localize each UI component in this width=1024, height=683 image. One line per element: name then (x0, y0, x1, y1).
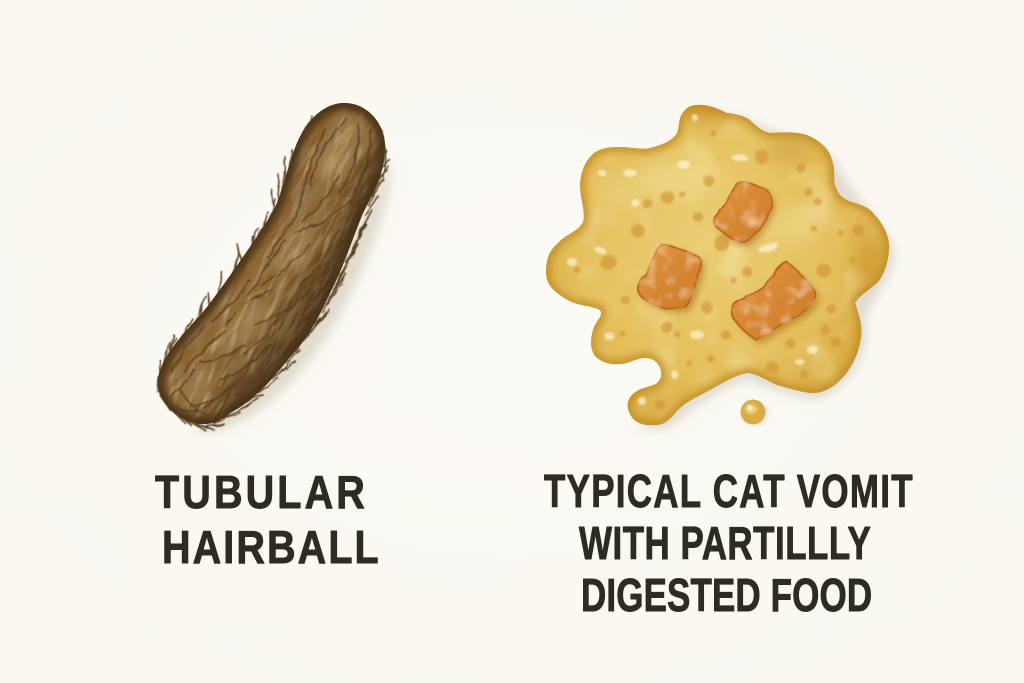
label: tubular hairball: HAIRBALL (162, 522, 379, 574)
label: typical cat vomit: WITH PARTILLLY (579, 517, 871, 569)
food chunk: top (714, 182, 775, 246)
hairball body (158, 103, 385, 424)
droplet (740, 400, 768, 425)
dark fur streaks, axis-aligned (158, 104, 384, 424)
illustration: vomit puddle (546, 104, 898, 433)
puddle body (546, 105, 889, 425)
puddle shading, spots and highlights (546, 104, 890, 426)
dark rim (158, 103, 385, 424)
darker lower right flank (215, 145, 385, 413)
infographic canvas (155, 103, 913, 612)
food chunk: left (638, 245, 705, 313)
dark fur streaks, crossing (168, 104, 376, 416)
illustration: tubular hairball (156, 103, 394, 436)
label: tubular hairball: TUBULAR (155, 467, 365, 519)
loose edge hairs (157, 116, 390, 430)
mottled pale wash (560, 116, 869, 420)
label: typical cat vomit (544, 465, 913, 621)
label: typical cat vomit: DIGESTED FOOD (581, 569, 872, 621)
mottled dark wash (600, 144, 878, 391)
food chunk: right (732, 262, 819, 344)
label: tubular hairball (155, 467, 379, 574)
label: typical cat vomit: TYPICAL CAT VOMIT (544, 465, 913, 517)
hairball cast shadow (190, 160, 392, 433)
hairball fur shading and strands (158, 103, 385, 424)
puddle cast shadow (635, 110, 895, 430)
pale fur streaks (167, 112, 375, 418)
